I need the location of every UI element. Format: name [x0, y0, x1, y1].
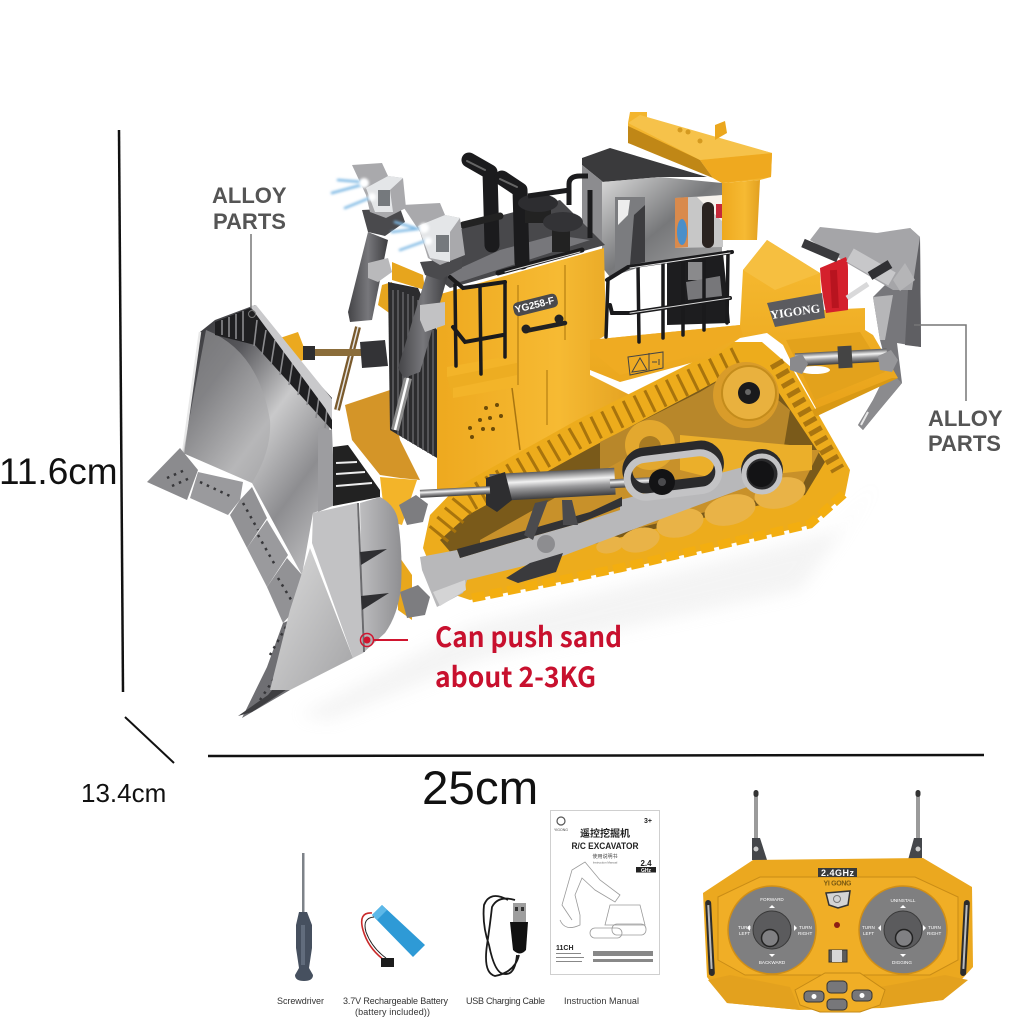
frequency label: 2.4GHz — [821, 868, 854, 878]
ground shadow — [300, 480, 880, 720]
dimension line: height — [119, 130, 123, 692]
accessory: instruction manual: YIGONG — [554, 828, 568, 832]
blade cutting plates — [147, 448, 198, 500]
cab — [582, 148, 730, 325]
left joystick panel: BACKWARD — [759, 960, 786, 965]
left joystick panel: FORWARD — [760, 897, 784, 902]
link oval — [625, 444, 721, 490]
accessory: instruction manual: 遥控挖掘机 — [580, 827, 630, 840]
hood top deck — [425, 200, 605, 288]
dimension label: height: 11.6cm — [0, 451, 118, 492]
accessory: screwdriver — [295, 853, 313, 981]
filler caps and pipes — [518, 176, 590, 252]
cab side window with driver — [675, 195, 723, 248]
headlight right — [392, 203, 465, 265]
blade inner bowl — [183, 305, 332, 575]
callout: push capacity: Can push sand — [435, 616, 622, 656]
accessory: instruction manual — [550, 810, 660, 974]
exhaust stacks — [463, 160, 522, 262]
YIGONG badge — [767, 293, 825, 327]
callout: push capacity — [360, 616, 622, 696]
YIGONG badge: YIGONG — [769, 301, 821, 322]
left joystick panel: LEFT — [739, 931, 750, 936]
roof canopy — [628, 112, 772, 240]
cab guard rail — [606, 252, 732, 342]
accessory: instruction manual: GHz — [641, 868, 652, 874]
accessory captions: Screwdriver — [277, 996, 324, 1006]
accessory captions: USB Charging Cable — [466, 996, 545, 1006]
ripper cylinders — [790, 243, 915, 374]
side handle and hood badge — [512, 293, 565, 334]
callout: right alloy parts: ALLOY — [928, 406, 1003, 431]
LED and switch — [829, 922, 847, 962]
support bracket — [506, 553, 563, 583]
right joystick panel: UNINSTALL — [891, 898, 916, 903]
accessory: instruction manual: 使用说明书 — [592, 853, 618, 860]
hydraulic cylinder — [489, 468, 616, 501]
accessory captions — [277, 996, 639, 1017]
dimension line: length — [208, 755, 984, 756]
accessory: instruction manual: R/C EXCAVATOR — [572, 841, 639, 851]
right joystick panel: DIGGING — [892, 960, 912, 965]
left joystick panel: TURN — [799, 925, 812, 930]
blade side column — [318, 428, 335, 512]
dimension line: depth — [125, 717, 174, 763]
accessory: battery — [362, 905, 425, 967]
function buttons — [795, 973, 885, 1012]
rear ripper — [810, 227, 921, 430]
callout: right alloy parts — [914, 325, 1003, 456]
callout: left alloy parts — [212, 183, 287, 318]
radiator — [378, 262, 437, 458]
callout: left alloy parts: ALLOY — [212, 183, 287, 208]
accessory: instruction manual: Instruction Manual — [593, 860, 618, 864]
warning sticker — [628, 352, 663, 375]
callout: push capacity: about 2-3KG — [435, 656, 596, 696]
hood guard rail — [450, 250, 582, 374]
headlight posts — [348, 208, 462, 378]
cab walls — [602, 177, 722, 277]
blade wedges — [360, 549, 387, 565]
illustration: RC bulldozer — [147, 112, 921, 720]
accessory: instruction manual: 3+ — [644, 818, 652, 825]
power button — [826, 891, 850, 908]
manual excavator drawing — [560, 862, 646, 938]
cab door window — [615, 197, 645, 270]
accessory captions: Instruction Manual — [564, 996, 639, 1006]
right joystick panel: TURN — [928, 925, 941, 930]
right joystick panel — [859, 886, 947, 974]
accessory captions: 3.7V Rechargeable Battery — [343, 996, 448, 1006]
frequency label — [818, 868, 857, 888]
blade top ribs — [215, 308, 332, 430]
blade end plate — [360, 497, 402, 653]
remote body — [703, 858, 973, 1010]
side grips — [705, 900, 715, 976]
cab engine block — [667, 253, 730, 325]
blade middle panel — [312, 503, 363, 658]
headlight left — [332, 163, 406, 218]
hood and front body — [345, 200, 640, 492]
right joystick panel: LEFT — [863, 931, 874, 936]
accessory captions: (battery included)) — [355, 1007, 430, 1017]
accessory: instruction manual: 2.4 — [640, 859, 652, 868]
remote controller — [703, 790, 973, 1012]
antennas — [752, 790, 922, 860]
callout: left alloy parts: PARTS — [213, 209, 286, 234]
rear deck — [590, 240, 898, 417]
dimension label: depth: 13.4cm — [81, 778, 166, 808]
side handle and hood badge: YG258-F — [514, 296, 556, 316]
accessory: USB cable — [484, 896, 528, 976]
right joystick panel: TURN — [862, 925, 875, 930]
blade left gusset — [270, 548, 353, 690]
right joystick panel: RIGHT — [927, 931, 941, 936]
accessory: instruction manual: 11CH — [556, 945, 574, 952]
road wheels — [594, 472, 809, 556]
front step — [447, 358, 517, 398]
yellow mount blocks and hex bolts — [380, 477, 430, 620]
track frame arm — [420, 444, 783, 607]
left joystick panel — [728, 886, 816, 974]
rear link pin — [741, 449, 783, 491]
dimension label: length: 25cm — [422, 762, 538, 815]
frequency label: YI GONG — [824, 880, 852, 888]
cab roof — [582, 148, 707, 182]
drive sprocket — [713, 362, 779, 428]
track — [423, 342, 850, 600]
left joystick panel: RIGHT — [798, 931, 812, 936]
push arm chrome rods — [280, 327, 408, 430]
dozer blade — [147, 305, 402, 718]
red bottle — [820, 257, 848, 313]
left joystick panel: TURN — [738, 925, 751, 930]
callout: right alloy parts: PARTS — [928, 431, 1001, 456]
vent holes — [468, 403, 503, 439]
